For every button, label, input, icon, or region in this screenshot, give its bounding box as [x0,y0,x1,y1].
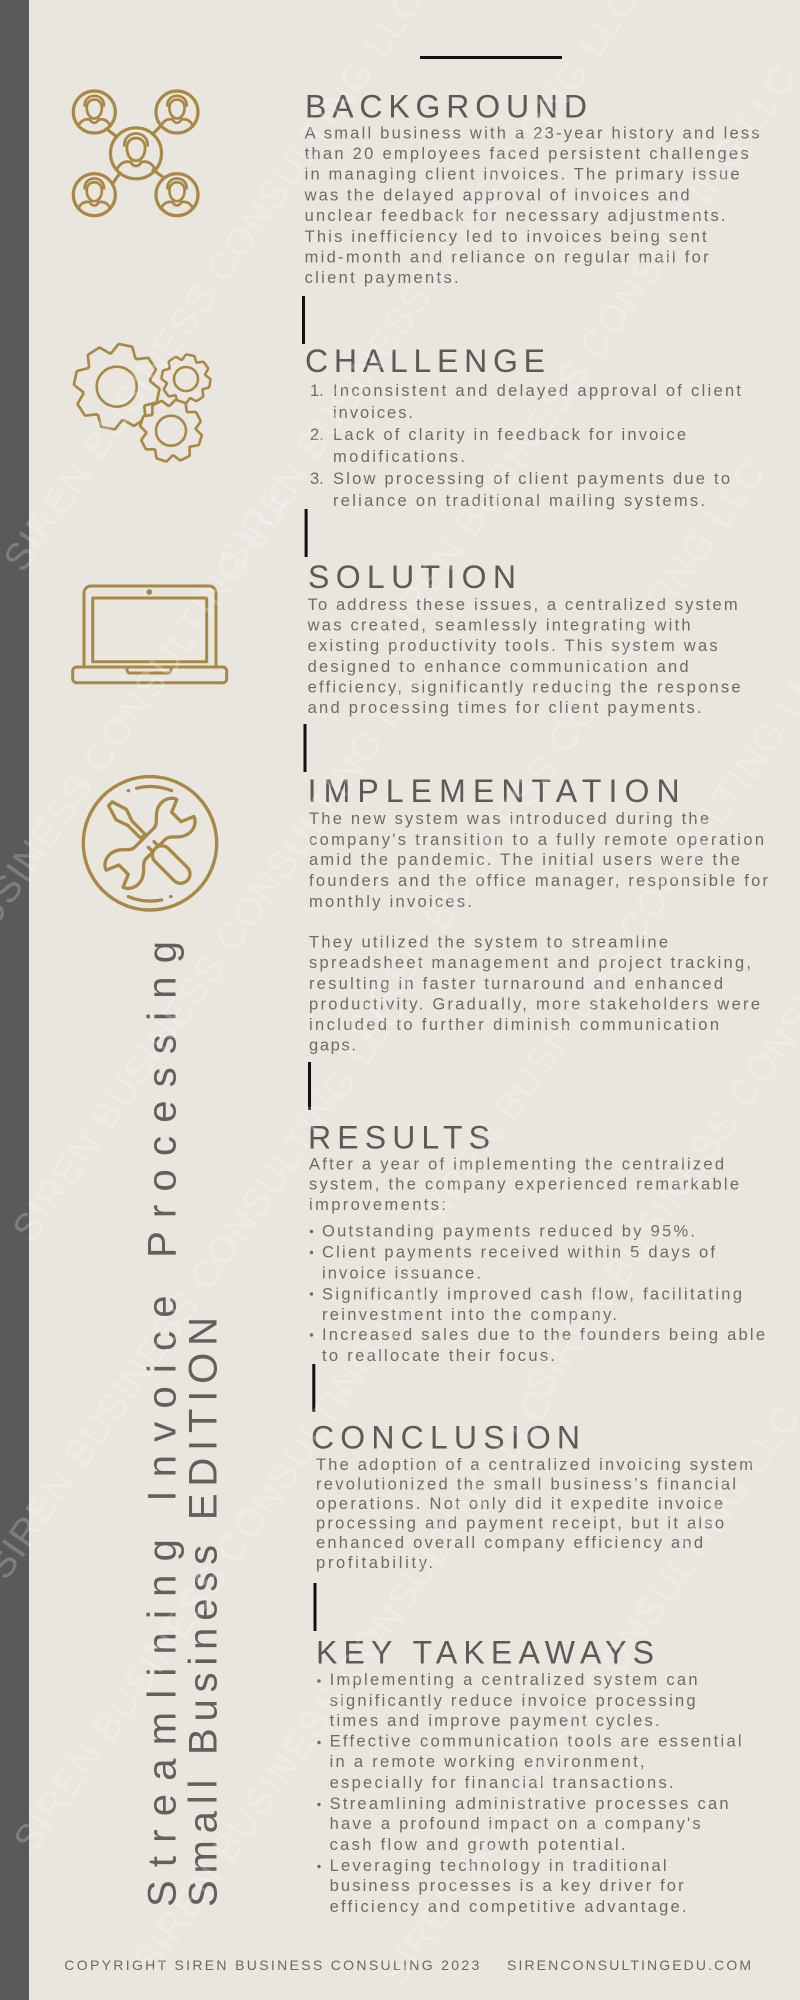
footer: SIRENCONSULTINGEDU.COM [507,1957,751,1973]
vertical title [141,941,225,1907]
text: implementation body: gaps. [309,1037,356,1055]
text: implementation body: monthly invoices. [309,893,472,911]
text: results bullets: Outstanding payments reduced by 95%. [322,1223,695,1241]
text: takeaways bullets: Effective communication tools are essential [330,1733,742,1751]
divider bar [308,1062,311,1110]
text: challenge list: 3. [310,470,324,488]
text: implementation body: amid the pandemic. The initial users were the [309,851,740,869]
text: implementation body: founders and the office manager, responsible for [309,872,769,890]
text: implementation body: resulting in faster turnaround and enhanced [309,975,723,993]
text: results bullets: Increased sales due to the founders being able [322,1326,765,1344]
text: results intro: improvements: [309,1196,446,1214]
panel: background [304,89,760,287]
footer: COPYRIGHT SIREN BUSINESS CONSULING 2023 [64,1957,480,1973]
text: results bullets: reinvestment into the company. [322,1306,617,1324]
text: implementation body: company's transition to a fully remote operation [309,831,764,849]
heading: background: BACKGROUND [305,89,587,125]
footer [64,1957,751,1973]
text: conclusion body: processing and payment receipt, but it also [316,1514,724,1532]
text: challenge list: reliance on traditional mailing systems. [333,492,705,510]
watermark: SIREN BUSINESS CONSULTING LLC [369,59,800,656]
text: results intro: After a year of implementing the centralized [309,1155,724,1173]
text: takeaways bullets: efficiency and competitive advantage. [330,1898,687,1916]
text: challenge list: Slow processing of client payments due to [333,470,730,488]
text: solution body: designed to enhance communication and [308,658,689,676]
panel: implementation [308,773,769,1055]
text: background body [304,124,760,287]
text: conclusion body: profitability. [316,1554,433,1572]
text: takeaways bullets: business processes is a key driver for [330,1877,684,1895]
heading: challenge: CHALLENGE [305,343,545,379]
panel: challenge [305,343,741,510]
text: challenge list [310,382,741,510]
panel: conclusion [311,1419,753,1572]
text: results bullets: Client payments received within 5 days of [322,1244,715,1262]
watermark: SIREN BUSINESS CONSULTING LLC [373,1398,800,1995]
text: solution body: efficiency, significantly reducing the response [308,678,741,696]
icon: laptop [73,586,227,683]
text: conclusion body: enhanced overall company efficiency and [316,1534,703,1552]
divider bar [314,1583,316,1631]
text: takeaways bullets: times and improve payment cycles. [330,1712,660,1730]
text: solution body: To address these issues, a centralized system [308,596,738,614]
heading: conclusion: CONCLUSION [311,1419,580,1455]
heading: solution: SOLUTION [308,559,516,595]
watermark: SIREN BUSINESS CONSULTING LLC [5,652,441,1249]
divider bar [304,724,306,772]
text: implementation body: included to further diminish communication [309,1016,719,1034]
divider bar [302,296,305,344]
text: challenge list: 2. [310,426,324,444]
text: background body: mid-month and reliance on regular mail for [305,248,709,266]
text: background body: was the delayed approval of invoices and [304,186,690,204]
text: background body: unclear feedback for necessary adjustments. [305,207,726,225]
text: conclusion body [316,1456,753,1572]
text: challenge list: 1. [310,382,324,400]
text: takeaways bullets: Implementing a centralized system can [330,1671,698,1689]
panel: key takeaways [316,1634,742,1916]
text: conclusion body: revolutionized the small business’s financial [316,1476,736,1494]
watermark: SIREN BUSINESS CONSULTING LLC [338,453,774,1050]
text: background body: This inefficiency led to invoices being sent [305,228,707,246]
text: solution body: and processing times for client payments. [308,699,702,717]
text: challenge list: Inconsistent and delayed approval of client [333,382,741,400]
text: conclusion body: The adoption of a centralized invoicing system [316,1456,753,1474]
text: solution body: was created, seamlessly integrating with [307,616,691,634]
text: solution body: existing productivity tools. This system was [308,637,718,655]
text: background body: than 20 employees faced persistent challenges [305,145,749,163]
text: takeaways bullets: significantly reduce invoice processing [330,1692,696,1710]
text: results bullets: Significantly improved cash flow, facilitating [322,1285,742,1303]
text: background body: in managing client invoices. The primary issue [305,166,740,184]
text: implementation body: spreadsheet management and project tracking, [309,954,751,972]
text: challenge list: Lack of clarity in feedback for invoice [333,426,686,444]
text: takeaways bullets: in a remote working environment, [330,1753,645,1771]
text: takeaways bullets: cash flow and growth potential. [330,1836,626,1854]
text: background body: A small business with a 23-year history and less [305,124,760,142]
vertical title: Small Business EDITION [181,1317,225,1907]
text: takeaways bullets: especially for financial transactions. [330,1774,674,1792]
text: conclusion body: operations. Not only did it expedite invoice [316,1495,723,1513]
panel: results [308,1119,765,1365]
divider bar [305,509,308,557]
text: implementation body: productivity. Gradually, more stakeholders were [309,996,760,1014]
text: results bullets: to reallocate their focus. [322,1347,555,1365]
text: takeaways bullets: Leveraging technology in traditional [330,1857,667,1875]
text: solution body [307,596,741,717]
heading: results: RESULTS [308,1119,490,1155]
panel: solution [307,559,741,717]
text: results bullets [310,1223,765,1365]
text: results intro [309,1155,739,1214]
divider bar [312,1364,315,1412]
icon: gears [68,338,213,468]
watermark: SIREN BUSINESS CONSULTING LLC [126,1384,562,1981]
text: takeaways bullets: have a profound impact on a company's [330,1815,701,1833]
text: takeaways bullets [317,1671,742,1916]
text: challenge list: modifications. [333,448,465,466]
icon: people network [73,91,198,216]
icon: tools [83,777,217,910]
text: challenge list: invoices. [333,404,413,422]
text: takeaways bullets: Streamlining administrative processes can [330,1795,729,1813]
vertical title: Streamlining Invoice Processing [141,941,185,1907]
left sidebar [0,0,29,2000]
text: implementation body [309,810,769,1055]
text: background body: client payments. [305,269,459,287]
text: results intro: system, the company experienced remarkable [309,1175,739,1193]
text: results bullets: invoice issuance. [322,1264,481,1282]
text: implementation body: They utilized the system to streamline [309,934,668,952]
top rule [420,56,562,59]
heading: implementation: IMPLEMENTATION [308,773,680,809]
watermark: SIREN BUSINESS CONSULTING LLC [6,1263,442,1860]
heading: key takeaways: KEY TAKEAWAYS [316,1634,654,1670]
text: implementation body: The new system was introduced during the [309,810,709,828]
